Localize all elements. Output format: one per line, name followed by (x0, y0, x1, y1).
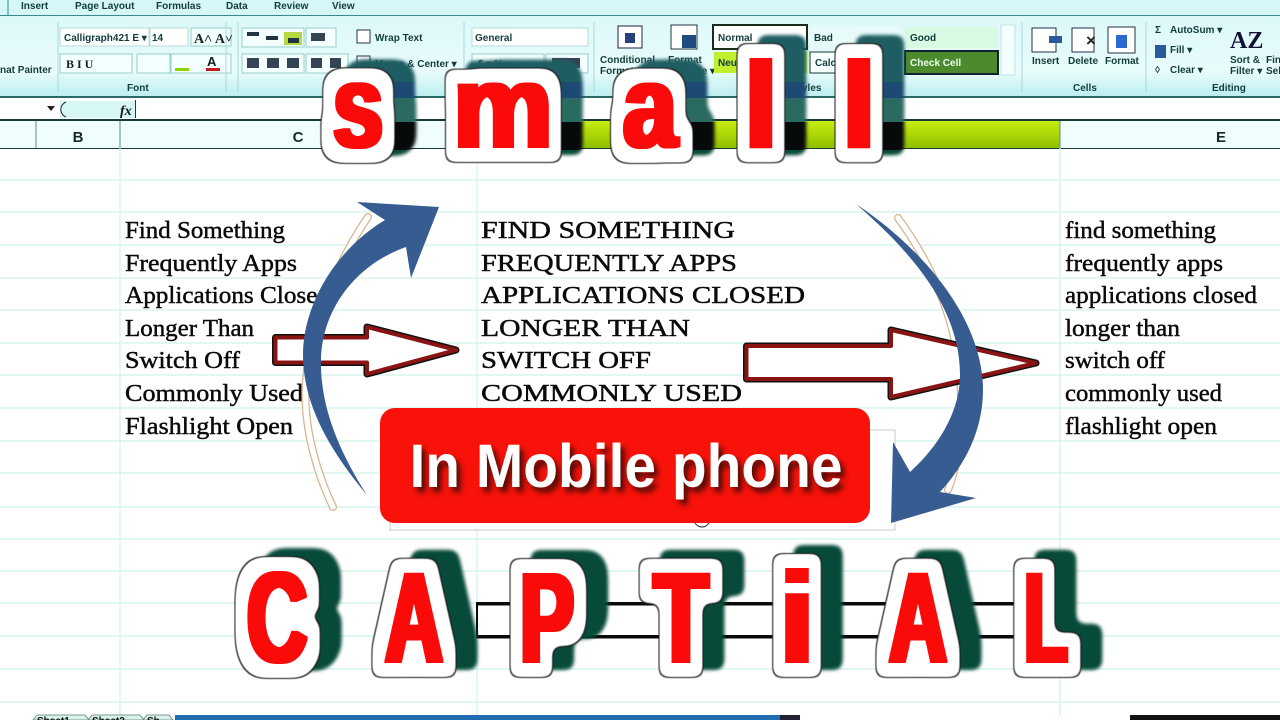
title word: CAPITAL: L (1024, 546, 1068, 689)
spreadsheet ribbon: General (475, 33, 512, 44)
spreadsheet ribbon: Clear ▾ (1170, 65, 1204, 76)
title word: CAPITAL (247, 546, 1068, 690)
spreadsheet ribbon: Conditional (600, 55, 655, 66)
title word: CAPITAL: i (779, 547, 815, 690)
column E text: lower case: switch off (1065, 348, 1165, 374)
formula bar: fx (120, 104, 132, 119)
spreadsheet ribbon: ◊ (1155, 65, 1160, 76)
column C text: title case: Longer Than (125, 316, 254, 342)
column C text: title case: Applications Closed (125, 283, 330, 309)
spreadsheet ribbon: Data (226, 1, 248, 12)
spreadsheet ribbon: Filter ▾ (1230, 66, 1263, 77)
spreadsheet ribbon: Formatting (600, 66, 652, 77)
callout button (380, 408, 870, 523)
column E text: lower case: frequently apps (1065, 251, 1223, 277)
spreadsheet ribbon: Insert (1032, 56, 1060, 67)
spreadsheet ribbon: Wrap Text (375, 33, 423, 44)
column E text: lower case (1065, 218, 1257, 440)
spreadsheet ribbon: Neutral (718, 58, 753, 69)
column E text: lower case: flashlight open (1065, 414, 1217, 440)
spreadsheet ribbon: Review (274, 1, 309, 12)
column E text: lower case: find something (1065, 218, 1216, 244)
spreadsheet ribbon: Format (668, 55, 703, 66)
column headers: E (1216, 129, 1226, 146)
spreadsheet ribbon: nat Painter (0, 65, 52, 76)
title word: CAPITAL: T (654, 547, 708, 690)
spreadsheet ribbon: AZ (1230, 28, 1263, 54)
column D text: upper case: FREQUENTLY APPS (481, 251, 737, 277)
column headers: B (73, 129, 84, 146)
title word: CAPITAL: A (889, 547, 947, 690)
spreadsheet ribbon: Editing (1212, 83, 1246, 94)
curved arrow: right blue (856, 204, 983, 523)
callout button: In Mobile phone (410, 432, 842, 500)
frame behind button (390, 430, 895, 530)
title word: CAPITAL: A (385, 547, 443, 690)
spreadsheet ribbon: as Table ▾ (668, 66, 716, 77)
spreadsheet ribbon: A˄ A˅ (194, 32, 233, 47)
spreadsheet ribbon: Sort & (1230, 55, 1260, 66)
spreadsheet ribbon: Formulas (156, 1, 201, 12)
spreadsheet ribbon: Font (127, 83, 149, 94)
column E text: lower case: commonly used (1065, 381, 1222, 407)
spreadsheet ribbon: Insert (21, 1, 49, 12)
column C text: title case: Frequently Apps (125, 251, 297, 277)
column C text: title case: Switch Off (125, 348, 240, 374)
column D text: upper case: LONGER THAN (481, 316, 690, 342)
spreadsheet ribbon: Bad (814, 33, 833, 44)
column D text: upper case: APPLICATIONS CLOSED (481, 283, 805, 309)
spreadsheet ribbon: 14 (152, 33, 164, 44)
column D text: upper case: COMMONLY USED (481, 381, 742, 407)
arrow: left outline (276, 327, 456, 374)
column C text: title case (125, 218, 330, 440)
arrow: right outline (746, 330, 1036, 397)
title word: small (333, 37, 876, 173)
spreadsheet ribbon: A (207, 54, 217, 69)
selection lines (476, 555, 1061, 638)
spreadsheet ribbon: Calligraph421 E ▾ (64, 33, 148, 44)
column D text: upper case (481, 218, 805, 407)
spreadsheet ribbon: Format (1105, 56, 1140, 67)
worksheet grid (0, 148, 1280, 716)
column E text: lower case: longer than (1065, 316, 1180, 342)
spreadsheet ribbon: × (1086, 31, 1096, 50)
title word: CAPITAL: P (520, 546, 574, 690)
column C text: title case: Flashlight Open (125, 414, 293, 440)
title word: small: a (623, 40, 678, 172)
column E text: lower case: applications closed (1065, 283, 1257, 309)
curved arrow: left blue (303, 202, 439, 495)
spreadsheet ribbon: $ ▾ % , (478, 59, 509, 70)
spreadsheet ribbon: Normal (718, 33, 753, 44)
spreadsheet ribbon: Merge & Center ▾ (375, 59, 458, 70)
title word: CAPITAL: C (247, 546, 307, 689)
spreadsheet ribbon: Calculation (815, 58, 869, 69)
title word: small: m (453, 41, 553, 173)
column D text: upper case: SWITCH OFF (481, 348, 651, 374)
spreadsheet ribbon: Page Layout (75, 1, 135, 12)
title word: small: l (842, 37, 876, 173)
spreadsheet ribbon: View (332, 1, 355, 12)
column D text: upper case: FIND SOMETHING (481, 218, 735, 244)
column C text: title case: Find Something (125, 218, 285, 244)
spreadsheet ribbon: Styles (792, 83, 822, 94)
spreadsheet ribbon: Σ (1155, 25, 1161, 36)
status bar (33, 715, 1280, 720)
column C text: title case: Commonly Used (125, 381, 303, 407)
spreadsheet ribbon: B I U (66, 57, 94, 71)
title word: small: l (744, 37, 778, 173)
column headers: C (293, 129, 304, 146)
spreadsheet ribbon: Fill ▾ (1170, 45, 1193, 56)
spreadsheet ribbon: Delete (1068, 56, 1098, 67)
spreadsheet ribbon: Good (910, 33, 936, 44)
spreadsheet ribbon (0, 0, 1280, 98)
spreadsheet ribbon: AutoSum ▾ (1170, 25, 1223, 36)
spreadsheet ribbon: Check Cell (910, 58, 961, 69)
formula bar (0, 99, 1280, 121)
sketch strokes (305, 217, 961, 507)
column headers (0, 121, 1280, 149)
title word: small: s (333, 41, 383, 173)
spreadsheet ribbon: Cells (1073, 83, 1097, 94)
